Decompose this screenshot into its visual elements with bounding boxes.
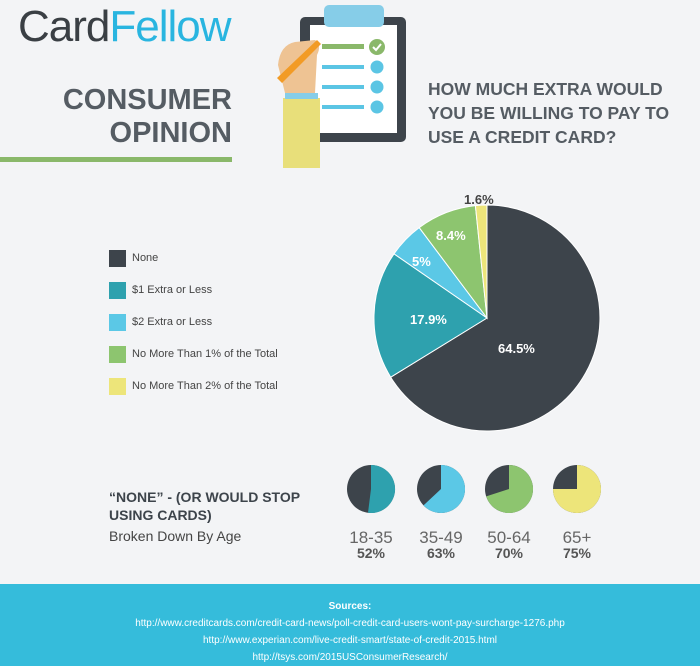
small pies by age: 18-35: [349, 528, 393, 547]
legend: [109, 250, 278, 395]
small pies by age: 70%: [495, 545, 524, 561]
age heading: USING CARDS): [109, 507, 212, 523]
legend: No More Than 1% of the Total: [132, 348, 278, 360]
pie chart: 5%: [412, 254, 431, 269]
pie chart: 1.6%: [464, 192, 494, 207]
small pies by age: 52%: [357, 545, 386, 561]
question heading: HOW MUCH EXTRA WOULD: [428, 79, 663, 99]
age subheading: Broken Down By Age: [109, 528, 241, 544]
pie chart: 17.9%: [410, 312, 447, 327]
small pies by age: [347, 465, 601, 561]
question heading: YOU BE WILLING TO PAY TO: [428, 103, 669, 123]
pie chart: [374, 192, 600, 432]
question heading: [428, 79, 669, 147]
small pies by age: 50-64: [487, 528, 531, 547]
green underline: [0, 157, 232, 162]
pie chart: 8.4%: [436, 228, 466, 243]
footer: sources: [0, 584, 700, 666]
title: consumer opinion: [63, 84, 232, 149]
pie chart: 64.5%: [498, 341, 535, 356]
footer: sources: Sources:: [329, 601, 371, 612]
legend: $1 Extra or Less: [132, 284, 212, 296]
age heading: “NONE” - (OR WOULD STOP: [109, 489, 300, 505]
footer: sources: http://tsys.com/2015USConsumerResearch/: [252, 652, 448, 663]
legend: None: [132, 252, 158, 264]
logo: CardFellow: [18, 2, 231, 51]
legend: No More Than 2% of the Total: [132, 380, 278, 392]
title: consumer opinion: OPINION: [110, 117, 232, 149]
small pies by age: 75%: [563, 545, 592, 561]
footer: sources: http://www.creditcards.com/credit-card-news/poll-credit-card-users-wont-pay-surcharge-1276.php: [135, 618, 565, 629]
small pies by age: 63%: [427, 545, 456, 561]
small pies by age: 35-49: [419, 528, 463, 547]
small pies by age: 65+: [563, 528, 591, 547]
title: consumer opinion: CONSUMER: [63, 84, 232, 116]
icon: clipboard with hand: [277, 5, 406, 168]
question heading: USE A CREDIT CARD?: [428, 127, 616, 147]
legend: $2 Extra or Less: [132, 316, 212, 328]
age heading: [109, 489, 300, 523]
footer: sources: http://www.experian.com/live-credit-smart/state-of-credit-2015.html: [203, 635, 497, 646]
